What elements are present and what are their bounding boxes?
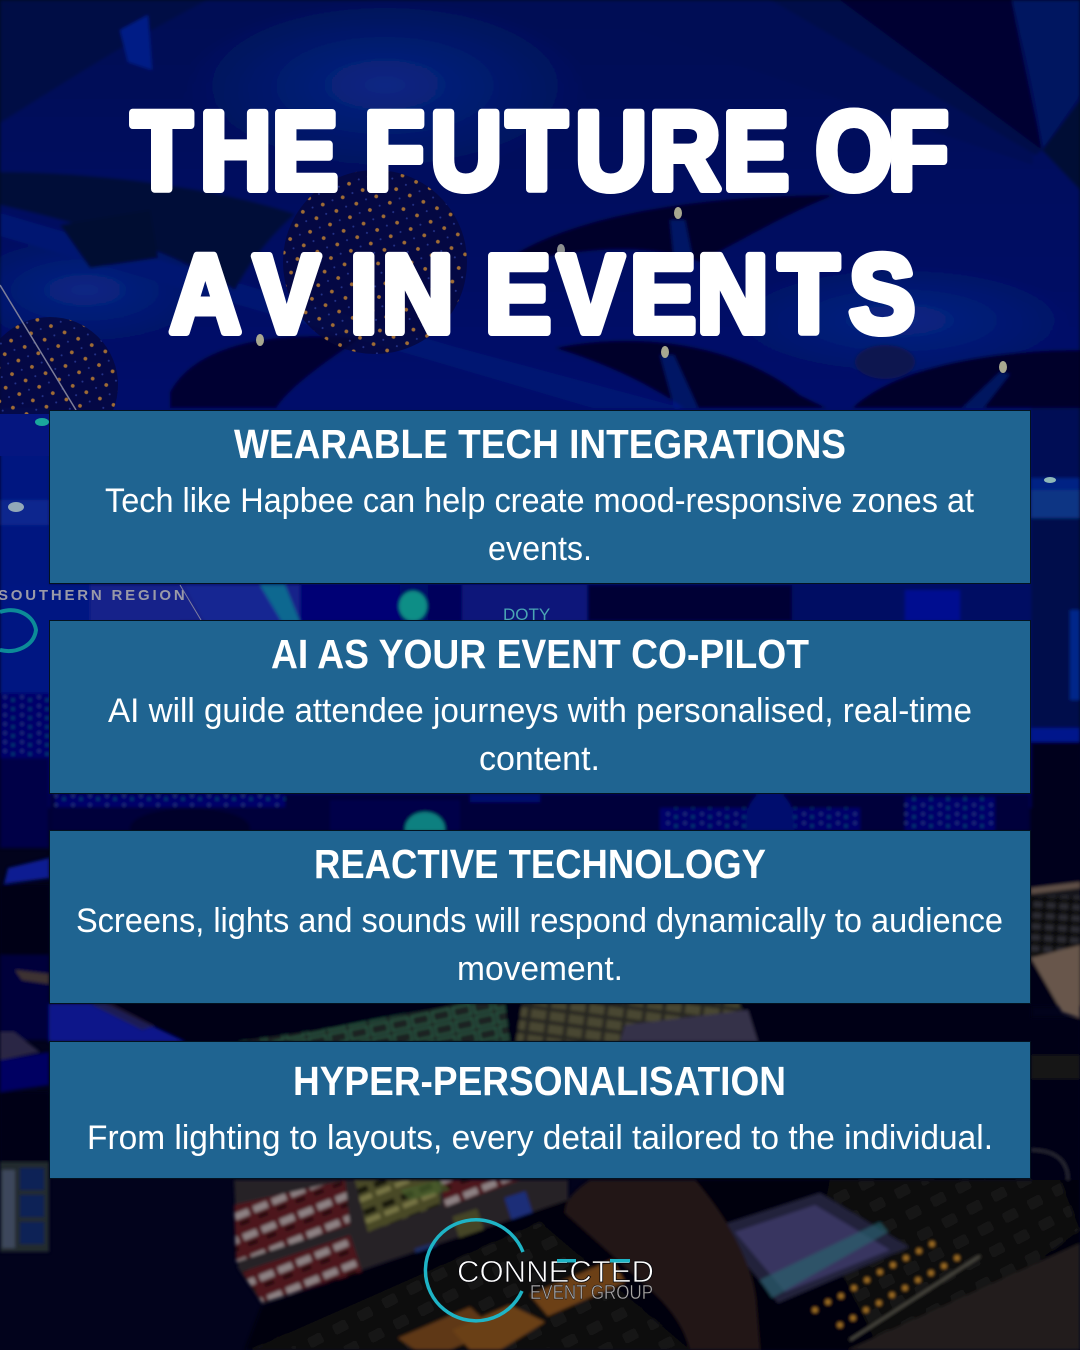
icon: logo ring [425, 1220, 523, 1321]
logo accent bars [557, 1259, 630, 1262]
body text: AI co-pilot: content. [479, 740, 600, 778]
panel: reactive technology [50, 830, 1030, 1004]
heading: wearable tech integrations: WEARABLE TECH INTEGRATIONS [234, 421, 846, 467]
logo: Connected Event Group [425, 1220, 654, 1321]
band between panels 2 and 3 [50, 794, 1030, 831]
stage signage: SOUTHERN REGION [0, 587, 188, 604]
stage signage [0, 418, 1056, 651]
lighting desk [0, 1162, 49, 1252]
dark hall [50, 831, 1080, 1006]
title: AV IN EVENTS [170, 233, 915, 356]
disco balls and ceiling spotlights [0, 170, 1007, 456]
heading: reactive technology: REACTIVE TECHNOLOGY [314, 841, 766, 887]
body text: AI co-pilot: AI will guide attendee journeys with personalised, real-time [108, 692, 972, 730]
title: THE FUTURE OF [132, 90, 948, 213]
body text: AI co-pilot [108, 692, 972, 778]
band between panels 3 and 4 [49, 1004, 1031, 1042]
body text: wearable tech: events. [488, 530, 592, 568]
body text: reactive technology: movement. [457, 950, 623, 988]
venue lower band [0, 408, 1080, 808]
logo wordmark: CONNECTED [457, 1254, 654, 1289]
left edge strip [0, 693, 49, 758]
right edge strip [1031, 408, 1080, 483]
panel: wearable tech integrations [50, 410, 1030, 584]
body text: wearable tech: Tech like Hapbee can help create mood-responsive zones at [105, 482, 975, 520]
title [132, 90, 948, 356]
heading: AI co-pilot: AI AS YOUR EVENT CO-PILOT [271, 631, 809, 677]
body text: reactive technology: Screens, lights and sounds will respond dynamically to audience [76, 902, 1003, 940]
laptop [1031, 887, 1080, 958]
heading: hyper-personalisation: HYPER-PERSONALISATION [293, 1058, 786, 1104]
panel: AI as your event co-pilot [50, 620, 1030, 794]
body text: reactive technology [76, 902, 1003, 988]
panel: hyper-personalisation [50, 1042, 1030, 1178]
body text: wearable tech [105, 482, 975, 568]
stage signage: DOTY [503, 605, 550, 624]
body text: hyper-personalisation: From lighting to layouts, every detail tailored to the individual. [87, 1119, 993, 1157]
logo subtitle: EVENT GROUP [530, 1282, 653, 1304]
